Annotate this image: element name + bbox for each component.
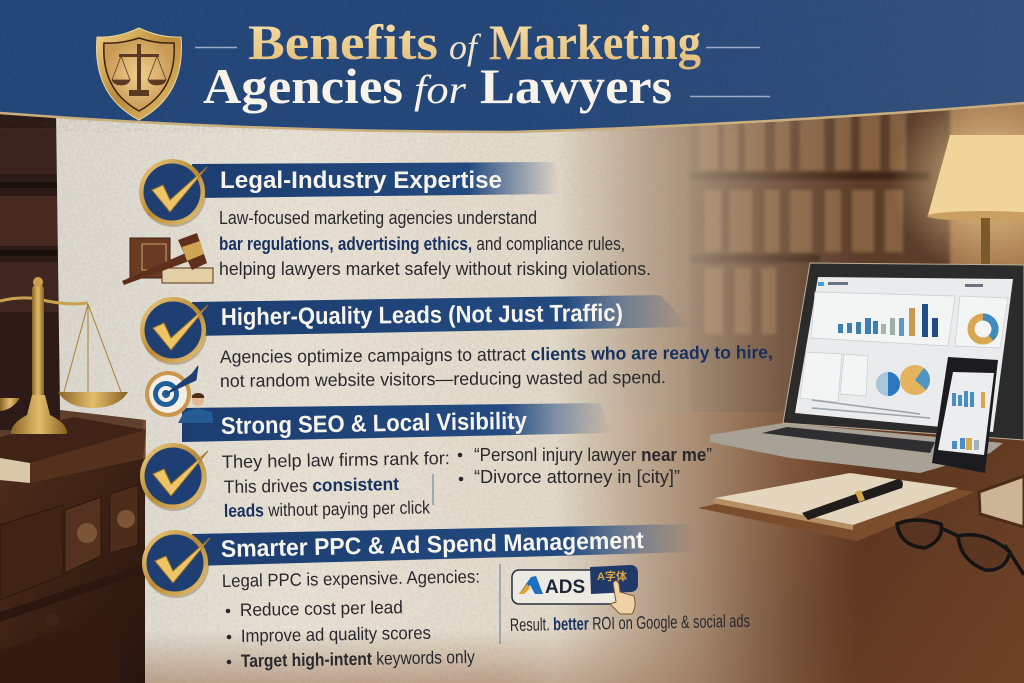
icon: target with dart and person [145,366,213,423]
body text 1: bar regulations, advertising ethics, and compliance rules, [219,234,625,254]
body text 1: helping lawyers market safely without risking violations. [219,259,651,279]
title lawyers: Lawyers [480,58,672,114]
body text 4: Target high-intent keywords only [241,647,475,671]
laptop base [710,423,1003,473]
body text 1: Law-focused marketing agencies understand [219,208,537,228]
body text 4: Reduce cost per lead [240,597,403,620]
body text 1 [219,208,651,279]
body text 3: They help law firms rank for: [222,448,450,472]
heading bar 4 [192,524,695,566]
laptop lid [783,263,1024,440]
phone [932,357,998,473]
eyeglasses [897,520,1024,575]
body text 4 [222,564,500,671]
icon: gavel and books [122,233,213,285]
table lamp [890,85,1024,275]
notebook and pen [698,473,975,541]
wooden desk [143,412,1024,683]
section 1: legal-industry expertise [122,159,651,285]
heading 2: Higher-Quality Leads (Not Just Traffic) [221,300,623,331]
left dark bookshelf [0,110,60,430]
title line 1: Benefits [248,14,438,70]
body text 4: Improve ad quality scores [241,623,431,646]
check badge 1 [139,159,207,227]
dashboard screen [795,277,1013,432]
title line 2: Agencies [203,58,403,114]
bar chart [838,304,938,337]
header banner [0,0,1024,132]
icon: ads button with hand cursor: ADS [545,577,585,598]
body text 3: This drives consistent [224,474,399,497]
body text 4: Legal PPC is expensive. Agencies: [222,566,480,591]
heading bar 1 [192,162,560,198]
body text 3: “Personl injury lawyer near me” [474,445,712,465]
result text: Result. better ROI on Google & social ads [510,611,750,635]
pen [802,479,903,520]
pie charts [876,365,930,396]
body text 3 [222,445,712,521]
section 4: smarter ppc and ad spend [142,524,750,671]
body text 3: leads without paying per click [224,497,431,521]
icon: ads button with hand cursor [512,565,638,614]
body text 2 [220,342,773,391]
brass scales of justice [0,277,128,434]
shield icon with scales [97,28,181,120]
parchment panel [56,118,840,683]
section 3: strong seo and local visibility [140,403,712,521]
heading 1: Legal-Industry Expertise [220,167,502,194]
body text 2: Agencies optimize campaigns to attract clients who are ready to hire, [220,342,773,367]
book on desk [979,476,1024,527]
large book on cabinet [0,417,146,483]
heading 4: Smarter PPC & Ad Spend Management [221,527,644,563]
icon: ads button with hand cursor: A字体 [597,569,627,583]
right bookshelf [690,100,950,420]
check badge 2 [140,297,208,365]
check badge 4 [142,530,210,598]
title marketing: Marketing [489,14,701,70]
title for: for [414,67,466,112]
title of: of [449,27,482,67]
donut chart [971,317,995,341]
heading bar 3 [182,403,612,442]
laptop with analytics dashboard [710,263,1024,473]
heading 3: Strong SEO & Local Visibility [221,408,528,440]
wooden cabinet [0,458,145,683]
body text 3: “Divorce attorney in [city]” [474,467,680,487]
body text 2: not random website visitors—reducing wasted ad spend. [220,367,666,391]
section 2: higher-quality leads [140,295,773,423]
check badge 3 [140,443,208,511]
heading bar 2 [192,295,690,336]
